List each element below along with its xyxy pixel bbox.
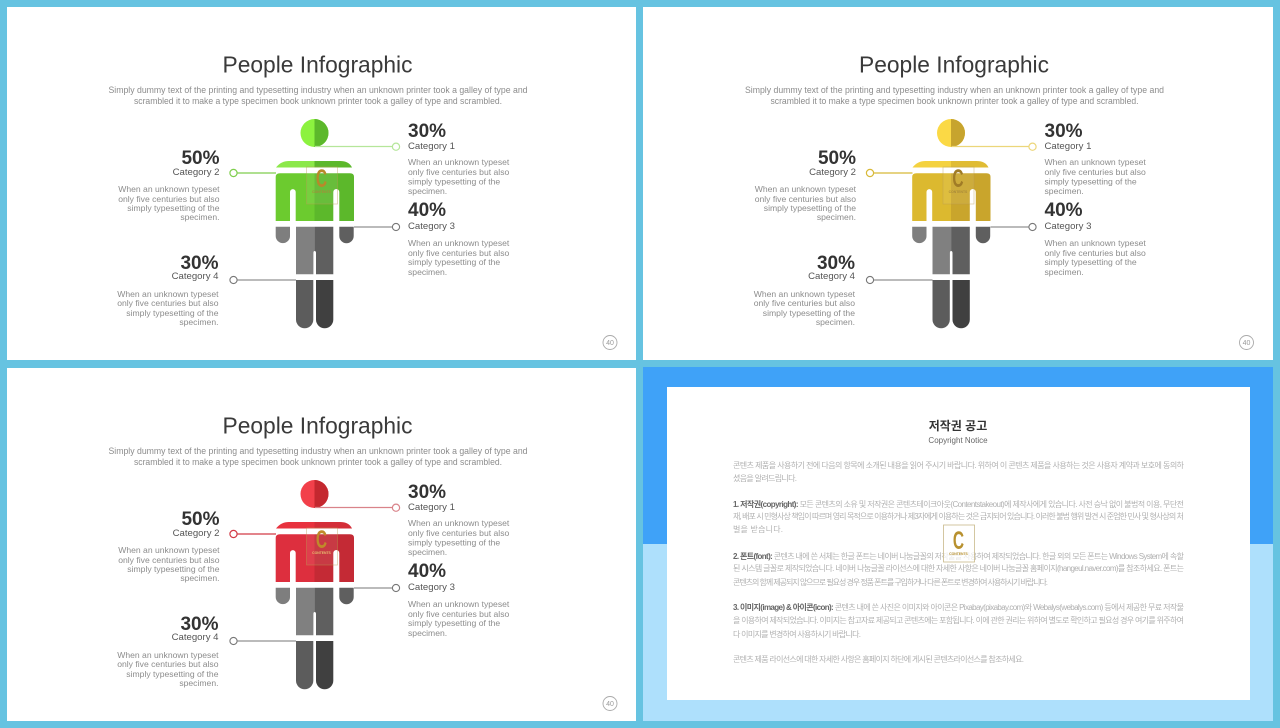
callout: category 4: only five centuries but also	[117, 298, 219, 308]
callout: category 1: 30%	[408, 121, 446, 142]
callout: category 1: When an unknown typeset	[408, 157, 510, 167]
watermark logo: CONTENTS	[949, 552, 969, 556]
callout: category 4: Category 4	[172, 632, 219, 643]
watermark logo: C	[316, 526, 327, 554]
callout: category 3: 40%	[1044, 200, 1083, 221]
callout: category 2: When an unknown typeset	[755, 184, 857, 194]
connector: category 3	[990, 223, 1036, 231]
watermark logo: CONTENTS	[312, 551, 332, 555]
callout: category 4: only five centuries but also	[117, 659, 219, 669]
watermark logo: CONTENTS	[949, 190, 968, 194]
callout: category 2	[755, 148, 857, 222]
page number	[603, 696, 617, 710]
watermark logo: C	[316, 165, 327, 193]
callout: category 1: simply typesetting of the	[408, 538, 500, 548]
watermark logo	[306, 165, 338, 204]
page number: 40	[606, 340, 614, 347]
callout: category 2: simply typesetting of the	[127, 564, 220, 574]
connector: category 1	[315, 143, 400, 150]
callout: category 3: simply typesetting of the	[408, 618, 500, 628]
panel: copyright notice	[643, 367, 1273, 721]
callout: category 3: only five centuries but also	[1044, 248, 1146, 258]
page number	[1240, 336, 1254, 350]
notice footer: 콘텐츠 제품 라이선스에 대한 자세한 사항은 홈페이지 하단에 게시된 콘텐츠라이선스를 참조하세요.	[733, 654, 1024, 664]
callout: category 2: 50%	[181, 148, 220, 169]
callout: category 1	[1044, 121, 1146, 196]
notice: font: 2. 폰트(font): 콘텐츠 내에 쓴 서체는 한글 폰트는 네이버 나눔글꼴의 저작물을 사용하여 제작되었습니다. 한글 외의 모든 폰트는 Windows System에 속할	[733, 551, 1185, 561]
callout: category 3: only five centuries but also	[408, 248, 509, 258]
subtitle	[108, 446, 528, 467]
watermark logo: C	[953, 527, 964, 555]
callout: category 3: Category 3	[1044, 221, 1091, 232]
connector: category 2	[230, 530, 276, 538]
connector: category 3	[354, 223, 400, 231]
page number: 40	[606, 701, 614, 708]
callout: category 4: 30%	[180, 614, 219, 635]
callout: category 3: specimen.	[408, 628, 447, 638]
callout: category 1: simply typesetting of the	[408, 176, 500, 186]
watermark logo: CONTENTS	[312, 190, 332, 194]
callout: category 1: 30%	[408, 482, 446, 503]
callout: category 1: Category 1	[408, 502, 455, 513]
callout: category 1: specimen.	[408, 186, 447, 196]
notice: font: 콘텐츠의 함께 제공되지 않으므로 필요성 경우 정품 폰트를 구입하거나 다른 폰트로 변경하여 사용하시기 바랍니다.	[733, 577, 1048, 587]
callout: category 2: simply typesetting of the	[127, 203, 220, 213]
callout: category 2: 50%	[181, 509, 220, 530]
callout: category 1: simply typesetting of the	[1044, 176, 1137, 186]
title: People Infographic	[222, 412, 413, 438]
callout: category 4: Category 4	[172, 271, 219, 282]
callout: category 4: Category 4	[808, 271, 856, 282]
callout: category 4: When an unknown typeset	[117, 650, 219, 660]
panel: red people infographic	[7, 368, 636, 721]
panel: green people infographic	[7, 7, 636, 360]
callout: category 4	[117, 614, 219, 688]
notice: copyright: 벌을 받습니다.	[733, 524, 783, 534]
callout: category 3	[1044, 200, 1146, 277]
notice heading: 저작권 공고	[929, 418, 987, 433]
watermark logo	[944, 525, 974, 562]
callout: category 2: 50%	[818, 148, 856, 169]
person figure	[276, 119, 354, 328]
subtitle: Simply dummy text of the printing and typesetting industry when an unknown printer took a galley of type and	[108, 446, 528, 456]
notice: copyright: 재, 배포 시 민형사상 책임이 따르며 영리 목적으로 이용하거나 제3자에게 이용하는 것은 금지되어 있습니다. 이러한 불법 행위 발견 시 준엄한 민사 및 형사상의 처	[733, 511, 1184, 521]
callout: category 4: specimen.	[179, 317, 218, 327]
page number	[603, 336, 617, 350]
notice: copyright: 1. 저작권(copyright): 모든 콘텐츠의 소유 및 저작권은 콘텐츠테이크아웃(Contentstakeout)에 제작사에게 있습니다. 사전 승낙 없이 불법적 이용, 무단전	[733, 499, 1184, 509]
callout: category 4: 30%	[180, 253, 219, 274]
notice: image and icon	[733, 602, 1184, 639]
connector: category 4	[230, 276, 296, 284]
notice: copyright	[733, 499, 1184, 534]
callout: category 2: only five centuries but also	[118, 194, 220, 204]
callout: category 1: 30%	[1044, 121, 1083, 142]
callout: category 3: only five centuries but also	[408, 609, 509, 619]
connector: category 1	[952, 143, 1036, 150]
callout: category 4: simply typesetting of the	[126, 308, 219, 318]
watermark logo	[943, 165, 974, 204]
notice: font: 된 시스템 글꼴로 제작되었습니다. 네이버 나눔글꼴 라이선스에 대한 자세한 사항은 네이버 나눔글꼴 홈페이지(hangeul.naver.com)를 참조하세요. 폰트는	[733, 563, 1184, 573]
subtitle: scrambled it to make a type specimen book unknown printer took a galley of type and scrambled.	[134, 457, 502, 467]
callout: category 1: When an unknown typeset	[1044, 157, 1146, 167]
callout: category 4: When an unknown typeset	[117, 289, 219, 299]
notice heading: Copyright Notice	[928, 436, 988, 445]
subtitle: scrambled it to make a type specimen book unknown printer took a galley of type and scrambled.	[770, 96, 1138, 106]
callout: category 3: When an unknown typeset	[408, 238, 510, 248]
callout: category 3: Category 3	[408, 582, 455, 593]
callout: category 3: When an unknown typeset	[1044, 238, 1146, 248]
callout: category 4	[754, 253, 856, 327]
callout: category 2: specimen.	[817, 212, 856, 222]
callout: category 3: When an unknown typeset	[408, 599, 510, 609]
callout: category 1: only five centuries but also	[408, 528, 509, 538]
callout: category 1	[408, 482, 510, 557]
callout: category 3: Category 3	[408, 221, 455, 232]
callout: category 4: When an unknown typeset	[754, 289, 856, 299]
callout: category 1: Category 1	[408, 141, 455, 152]
callout: category 3: 40%	[408, 561, 446, 582]
callout: category 4	[117, 253, 219, 327]
notice: image and icon: 다 이미지를 변경하여 사용하시기 바랍니다.	[733, 629, 861, 639]
callout: category 2: only five centuries but also	[118, 555, 220, 565]
subtitle	[108, 85, 528, 106]
callout: category 2: only five centuries but also	[755, 194, 856, 204]
callout: category 3: specimen.	[1044, 267, 1084, 277]
subtitle	[745, 85, 1164, 106]
connector: category 2	[866, 169, 912, 177]
connector: category 4	[230, 637, 296, 645]
subtitle: Simply dummy text of the printing and typesetting industry when an unknown printer took a galley of type and	[108, 85, 528, 95]
notice heading	[928, 418, 988, 445]
subtitle: Simply dummy text of the printing and typesetting industry when an unknown printer took a galley of type and	[745, 85, 1164, 95]
notice intro	[733, 460, 1185, 483]
connector: category 2	[230, 169, 276, 177]
connector: category 1	[315, 504, 400, 511]
callout: category 3	[408, 200, 510, 277]
watermark logo: C	[952, 165, 964, 193]
callout: category 2: simply typesetting of the	[764, 203, 856, 213]
callout: category 3	[408, 561, 510, 638]
title: People Infographic	[859, 52, 1049, 78]
callout: category 2: Category 2	[809, 167, 856, 178]
callout: category 3: simply typesetting of the	[1044, 257, 1137, 267]
person figure	[276, 480, 354, 689]
callout: category 4: only five centuries but also	[754, 298, 855, 308]
callout: category 4: specimen.	[816, 317, 855, 327]
callout: category 2: When an unknown typeset	[118, 184, 220, 194]
callout: category 1: When an unknown typeset	[408, 518, 510, 528]
subtitle: scrambled it to make a type specimen book unknown printer took a galley of type and scrambled.	[134, 96, 502, 106]
panel: yellow people infographic	[643, 7, 1273, 360]
callout: category 4: specimen.	[179, 678, 218, 688]
connector: category 4	[866, 276, 932, 284]
callout: category 4: simply typesetting of the	[763, 308, 855, 318]
person figure	[912, 119, 990, 328]
callout: category 2: specimen.	[180, 212, 220, 222]
callout: category 1: specimen.	[1044, 186, 1084, 196]
callout: category 3: specimen.	[408, 267, 447, 277]
watermark logo	[306, 526, 338, 565]
notice intro: 콘텐츠 제품을 사용하기 전에 다음의 항목에 소개된 내용을 읽어 주시기 바랍니다. 위하여 이 콘텐츠 제품을 사용하는 것은 사용자 계약과 보호에 동의하	[733, 460, 1185, 470]
callout: category 1: only five centuries but also	[1044, 167, 1146, 177]
callout: category 2: When an unknown typeset	[118, 545, 220, 555]
callout: category 1: specimen.	[408, 547, 447, 557]
connector: category 3	[354, 584, 400, 592]
notice: image and icon: 을 이용하여 제작되었습니다. 이미지는 참고자료 제공되고 콘텐츠에는 포함됩니다. 이에 관한 권리는 위하여 별도로 확인하고 필요성 경우 여기를 위주하여	[733, 615, 1184, 625]
title: People Infographic	[222, 52, 413, 78]
callout: category 2: specimen.	[180, 573, 220, 583]
callout: category 1: Category 1	[1044, 141, 1091, 152]
callout: category 2	[118, 148, 220, 222]
callout: category 2	[118, 509, 220, 583]
notice intro: 셨음을 알려드립니다.	[733, 473, 797, 483]
callout: category 3: 40%	[408, 200, 446, 221]
callout: category 4: simply typesetting of the	[126, 669, 219, 679]
page number: 40	[1243, 340, 1250, 347]
callout: category 1	[408, 121, 510, 196]
callout: category 4: 30%	[817, 253, 855, 274]
notice: image and icon: 3. 이미지(image) & 아이콘(icon): 콘텐츠 내에 쓴 사진은 이미지와 아이콘은 Pixabay(pixabay.com)와 Webalys(webalys.com) 등에서 제공한 무료 저작물	[733, 602, 1184, 612]
callout: category 2: Category 2	[173, 167, 220, 178]
callout: category 1: only five centuries but also	[408, 167, 509, 177]
callout: category 2: Category 2	[173, 528, 220, 539]
notice: font	[733, 551, 1185, 587]
callout: category 3: simply typesetting of the	[408, 257, 500, 267]
